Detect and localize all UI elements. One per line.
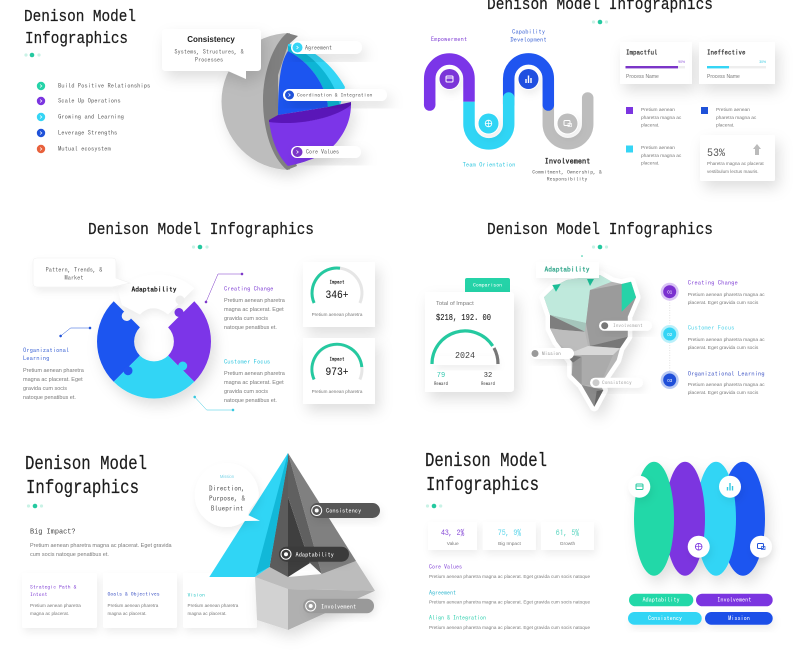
- text: creating change: magna ac placerat. Eget: [224, 307, 284, 313]
- card: impact 346: Impact: [330, 279, 345, 286]
- step 02: placerat. Eget gravida cum socis: [688, 345, 759, 351]
- legend: cyan: pharetra magna ac: [641, 153, 682, 159]
- card: strategic path: [22, 573, 97, 628]
- overlapping ellipses: [634, 462, 765, 576]
- list: align and integration: Align & Integration: [429, 615, 486, 621]
- snake path: [424, 59, 588, 144]
- pill: consistency: [310, 503, 380, 518]
- snake labels: Empowerment: [431, 36, 467, 42]
- card: ineffective: [699, 42, 775, 84]
- list: core values: Pretium aenean pharetra magna ac placerat. Eget gravida cum socis natoque: [429, 574, 590, 579]
- text: organizational learning: magna ac placerat. Eget: [23, 377, 83, 383]
- callout: mission: Purpose, &: [209, 495, 245, 503]
- panel: snake process: [424, 0, 775, 182]
- legend: blue: placerat.: [716, 122, 734, 128]
- legend: blue: [701, 107, 757, 128]
- legend: blue: pharetra magna ac: [716, 115, 757, 121]
- card: vision: [183, 573, 257, 628]
- sphere: [222, 33, 351, 170]
- card: 53 percent: 53%: [707, 148, 725, 160]
- pill: adaptability: Adaptability: [296, 551, 334, 558]
- title: [25, 453, 147, 499]
- card: impact 346: 346+: [326, 290, 348, 302]
- label: involvement: Involvement: [613, 322, 643, 328]
- title dots: [592, 20, 608, 24]
- timeline line: [669, 300, 671, 372]
- title: Infographics: [426, 474, 539, 496]
- pill: involvement: Involvement: [321, 603, 356, 610]
- card: impact 346: [303, 262, 375, 327]
- snake labels: Team Orientation: [463, 161, 515, 168]
- list: agreement: Agreement: [429, 590, 456, 596]
- pill: adaptability: [629, 594, 693, 606]
- text: organizational learning: Learning: [23, 354, 49, 362]
- label: mission: [531, 348, 574, 359]
- icon: capability development: [518, 68, 540, 90]
- text: customer focus: magna ac placerat. Eget: [224, 380, 284, 386]
- title: [425, 450, 547, 496]
- stat: growth: 61, 5%: [556, 528, 579, 538]
- card: impact 973: Impact: [330, 356, 345, 363]
- pill: involvement: [303, 599, 374, 613]
- label: core values: Core Values: [306, 149, 339, 155]
- card: goals and objectives: Pretium aenean pharetra: [108, 603, 159, 608]
- icon: globe: [688, 536, 710, 558]
- card: impactful: Process Name: [626, 74, 659, 80]
- card: total of impact: $218, 192. 00: [436, 312, 491, 323]
- pill: involvement: [696, 594, 773, 606]
- callout: adaptability: [536, 255, 599, 278]
- card: impact 346: Pretium aenean pharetra: [312, 312, 363, 317]
- legend: purple: Pretium aenean: [641, 107, 675, 113]
- step 01: [661, 279, 765, 306]
- icon: chat: [750, 536, 772, 558]
- title: Denison Model: [425, 450, 547, 472]
- card: impactful: 90%: [678, 60, 685, 64]
- legend: cyan: [626, 145, 682, 166]
- panel: ellipses: [425, 450, 773, 630]
- card: goals and objectives: Goals & Objectives: [108, 591, 160, 597]
- callout: consistency: Consistency: [187, 35, 235, 44]
- card: goals and objectives: [103, 573, 177, 628]
- puzzle donut: [97, 274, 211, 398]
- snake labels: Development: [510, 36, 547, 43]
- bullet list: Build Positive Relationships: [58, 82, 150, 89]
- step 01: Pretium aenean pharetra magna ac: [688, 292, 765, 298]
- label: involvement: [599, 321, 652, 331]
- icon: bars: [719, 476, 741, 498]
- card: ineffective: Ineffective: [707, 48, 746, 56]
- pill: involvement: Involvement: [717, 596, 751, 603]
- stat: value: Value: [447, 541, 459, 547]
- callout: mission: Mission: [220, 474, 235, 479]
- icon: involvement: [556, 112, 578, 134]
- callout: mission: [195, 463, 260, 527]
- title: Denison Model Infographics: [487, 221, 713, 240]
- step 01: placerat. Eget gravida cum socis: [688, 300, 759, 306]
- title: [24, 8, 136, 49]
- pill: mission: [705, 612, 773, 625]
- snake labels: Capability: [512, 28, 545, 35]
- card: impact 973: Pretium aenean pharetra: [312, 389, 363, 394]
- text: organizational learning: Pretium aenean pharetra: [23, 368, 85, 374]
- title dots: [24, 53, 41, 57]
- bullet list: Scale Up Operations: [58, 97, 121, 104]
- text: creating change: [224, 285, 286, 331]
- text: customer focus: [224, 358, 286, 404]
- step 03: Organizational Learning: [688, 370, 765, 377]
- text: customer focus: natoque penatibus et.: [224, 398, 277, 404]
- leader: creating change: [205, 273, 243, 303]
- label: consistency: [590, 378, 643, 388]
- title dots: [192, 245, 209, 249]
- low poly map: [544, 275, 636, 407]
- list: core values: [429, 564, 590, 579]
- card: 53 percent: Pharetra magna ac placerat: [707, 161, 764, 166]
- text: big impact: Big Impact?: [30, 528, 76, 536]
- card: vision: Vision: [188, 592, 205, 598]
- text: big impact: Pretium aenean pharetra magna ac placerat. Eget gravida: [30, 543, 172, 549]
- label: agreement: [291, 41, 362, 54]
- text: creating change: natoque penatibus et.: [224, 325, 277, 331]
- label: agreement: Agreement: [305, 45, 332, 51]
- callout: consistency: Processes: [195, 56, 223, 63]
- leader: organizational learning: [60, 327, 91, 337]
- card: ineffective: Process Name: [707, 74, 740, 80]
- puzzle donut: Adaptability: [130, 285, 177, 294]
- text: organizational learning: gravida cum socis: [23, 386, 67, 392]
- bullet list: Leverage Strengths: [58, 129, 117, 136]
- bullet list: Mutual ecosystem: [58, 145, 111, 152]
- list: core values: Core Values: [429, 564, 462, 570]
- step 01: Creating Change: [688, 279, 738, 286]
- snake labels: Commitment, Ownership, &: [532, 169, 602, 175]
- leader: customer focus: [194, 396, 234, 411]
- callout: consistency: Systems, Structures, &: [174, 48, 244, 56]
- step 02: Customer Focus: [688, 324, 735, 331]
- card: total of impact: Total of Impact: [436, 301, 474, 307]
- callout: mission: Blueprint: [211, 505, 243, 512]
- text: organizational learning: [23, 346, 85, 401]
- card: strategic path: magna ac placerat.: [30, 611, 69, 616]
- icon: empowerment: [438, 68, 460, 90]
- list: agreement: [429, 590, 590, 604]
- stat: growth: [541, 522, 594, 550]
- callout: mission: Direction,: [209, 485, 245, 493]
- text: creating change: Pretium aenean pharetra: [224, 298, 286, 304]
- card: 53 percent: vestibulum lectus mauris.: [707, 169, 759, 174]
- step 02: Pretium aenean pharetra magna ac: [688, 337, 765, 343]
- card: impact 973: 973+: [326, 367, 348, 379]
- label: consistency: Consistency: [602, 380, 632, 386]
- step 02: 02: [667, 332, 673, 337]
- title dots: [592, 245, 608, 249]
- panel: low poly map: [425, 221, 765, 407]
- card: total of impact: 79: [437, 372, 445, 380]
- step 03: Pretium aenean pharetra magna ac: [688, 382, 765, 388]
- text: big impact: [30, 528, 172, 558]
- pill: mission: Mission: [728, 614, 750, 622]
- card: vision: Pretium aenean pharetra: [188, 603, 239, 608]
- text: customer focus: gravida cum socis: [224, 389, 268, 395]
- snake labels: Responsibility: [547, 176, 587, 182]
- label: mission: Mission: [542, 350, 561, 356]
- title: Denison Model Infographics: [88, 221, 314, 240]
- title: Denison Model: [25, 453, 147, 475]
- card: total of impact: 2024: [455, 350, 475, 361]
- card: total of impact: Reward: [434, 381, 448, 386]
- legend: cyan: placerat.: [641, 160, 659, 166]
- pill: adaptability: [279, 547, 349, 562]
- text: customer focus: Customer Focus: [224, 358, 270, 365]
- card: total of impact: Comparison: [473, 282, 502, 288]
- card: total of impact: 32: [484, 372, 492, 380]
- stat: big impact: Big Impact: [498, 541, 521, 547]
- text: customer focus: Pretium aenean pharetra: [224, 371, 286, 377]
- icon: team orientation: [478, 112, 500, 134]
- stat: value: [428, 522, 477, 550]
- card: 53 percent: [700, 135, 775, 181]
- legend: cyan: Pretium aenean: [641, 145, 675, 151]
- card: goals and objectives: magna ac placerat.: [108, 611, 147, 616]
- card: strategic path: Strategic Path &: [30, 584, 76, 590]
- bullet list: Growing and Learning: [58, 113, 124, 120]
- card: strategic path: Intent: [30, 592, 47, 598]
- pill: consistency: Consistency: [648, 614, 682, 622]
- text: creating change: Creating Change: [224, 285, 273, 292]
- callout: pattern trends market: Market: [65, 274, 83, 281]
- card: impact 973: [303, 338, 375, 404]
- title: Denison Model: [24, 8, 136, 27]
- card: impactful: [620, 42, 692, 84]
- title dots: [426, 504, 442, 508]
- label: core values: [291, 146, 361, 158]
- title dots: [27, 504, 43, 508]
- pyramid: [209, 453, 375, 630]
- pill: consistency: [628, 612, 702, 625]
- pill: consistency: Consistency: [326, 507, 361, 514]
- stat: big impact: [483, 522, 536, 550]
- step 03: [661, 370, 765, 396]
- card: vision: magna ac placerat.: [188, 611, 227, 616]
- text: big impact: cum socis natoque penatibus et.: [30, 552, 109, 558]
- panel: sphere layers: [24, 8, 387, 170]
- icon: card: [628, 476, 650, 498]
- stat: growth: Growth: [560, 541, 576, 547]
- label: coordination and integration: Coordination & Integration: [297, 92, 372, 98]
- card: total of impact: Reward: [481, 381, 495, 386]
- title: Infographics: [25, 30, 128, 49]
- stat: big impact: 75, 9%: [498, 528, 521, 538]
- callout: adaptability: Adaptability: [544, 265, 590, 274]
- pill: adaptability: Adaptability: [642, 596, 680, 603]
- legend: blue: Pretium aenean: [716, 107, 750, 113]
- step 03: 03: [667, 378, 673, 383]
- legend: purple: pharetra magna ac: [641, 115, 682, 121]
- card: total of impact: [425, 278, 514, 392]
- legend: purple: [626, 107, 682, 128]
- stat: value: 43, 2%: [441, 528, 464, 538]
- step 03: placerat. Eget gravida cum socis: [688, 390, 759, 396]
- text: organizational learning: Organizational: [23, 346, 69, 354]
- title: Infographics: [26, 477, 139, 499]
- list: agreement: Pretium aenean pharetra magna ac placerat. Eget gravida cum socis natoque: [429, 600, 590, 604]
- list: align and integration: [429, 615, 590, 630]
- label: coordination and integration: [283, 89, 387, 101]
- snake labels: Involvement: [545, 156, 590, 165]
- step 02: [661, 324, 765, 351]
- text: creating change: gravida cum socis: [224, 316, 268, 322]
- snake labels: [431, 28, 602, 182]
- panel: pyramid: [22, 453, 380, 630]
- card: strategic path: Pretium aenean pharetra: [30, 603, 81, 608]
- text: organizational learning: natoque penatibus et.: [23, 395, 76, 401]
- callout: consistency: [162, 29, 261, 79]
- list: align and integration: Pretium aenean pharetra magna ac placerat. Eget gravida cum socis natoque: [429, 625, 590, 630]
- panel: puzzle donut: [23, 221, 375, 411]
- card: impactful: Impactful: [626, 48, 658, 57]
- bullet list: [37, 82, 150, 153]
- callout: pattern trends market: [33, 258, 130, 287]
- card: ineffective: 30%: [759, 60, 766, 64]
- legend: purple: placerat.: [641, 122, 659, 128]
- step 01: 01: [667, 290, 673, 294]
- callout: pattern trends market: Pattern, Trends, &: [46, 266, 103, 274]
